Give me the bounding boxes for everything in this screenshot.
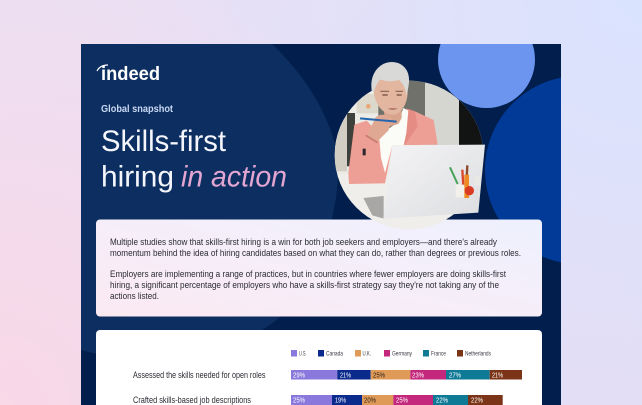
panel: chart — [96, 330, 542, 405]
laptop — [363, 145, 485, 219]
bar: assessed skills: 29% — [293, 371, 305, 380]
bar: job descriptions: 22% — [471, 396, 483, 405]
intro text: hiring, a significant percentage of employers who have a skills-first strategy say they're not taking any of the — [110, 280, 499, 290]
row label: assessed skills: Assessed the skills needed for open roles — [133, 370, 266, 380]
eyebrow: global snapshot: Global snapshot — [101, 103, 173, 115]
bar: job descriptions: 22% — [436, 396, 448, 405]
legend — [291, 350, 491, 357]
intro text: Employers are implementing a range of practices, but in countries where fewer employers are doing skills-first — [110, 269, 506, 279]
bar: assessed skills: 25% — [373, 371, 385, 380]
logo: indeed: indeed — [101, 64, 160, 85]
bar: assessed skills: 27% — [449, 371, 461, 380]
bar: assessed skills: 23% — [412, 371, 424, 380]
bar: job descriptions: 20% — [364, 396, 376, 405]
title: Skills-first — [101, 125, 227, 158]
bar: assessed skills — [291, 370, 522, 380]
legend: France — [431, 351, 447, 357]
woman — [348, 62, 438, 184]
intro text: momentum behind the idea of hiring candidates based on what they can do, rather than degrees or previous roles. — [110, 248, 521, 258]
legend: U.S. — [299, 351, 307, 357]
bar: job descriptions: 19% — [335, 396, 346, 405]
pencil cup — [450, 165, 480, 198]
legend: U.K. — [362, 351, 371, 357]
photo: woman at laptop — [333, 62, 489, 233]
bar: assessed skills: 21% — [340, 371, 351, 380]
row label: job descriptions: Crafted skills-based job descriptions — [133, 395, 251, 405]
legend: Canada — [326, 351, 344, 357]
panel: intro — [96, 220, 542, 316]
bar: job descriptions: 25% — [293, 396, 305, 405]
title — [101, 125, 287, 194]
intro text: actions listed. — [110, 291, 159, 301]
bar: job descriptions — [291, 395, 503, 405]
legend: Netherlands — [465, 351, 491, 357]
legend: Germany — [392, 351, 412, 357]
title: in action — [181, 160, 287, 194]
bar: assessed skills: 21% — [492, 371, 503, 380]
header card background — [81, 44, 561, 405]
intro text: Multiple studies show that skills-first hiring is a win for both job seekers and employers—and there's already — [110, 237, 497, 247]
bar: job descriptions: 25% — [396, 396, 408, 405]
title: hiring — [101, 160, 174, 194]
infographic page — [81, 44, 561, 405]
intro text — [110, 237, 521, 301]
